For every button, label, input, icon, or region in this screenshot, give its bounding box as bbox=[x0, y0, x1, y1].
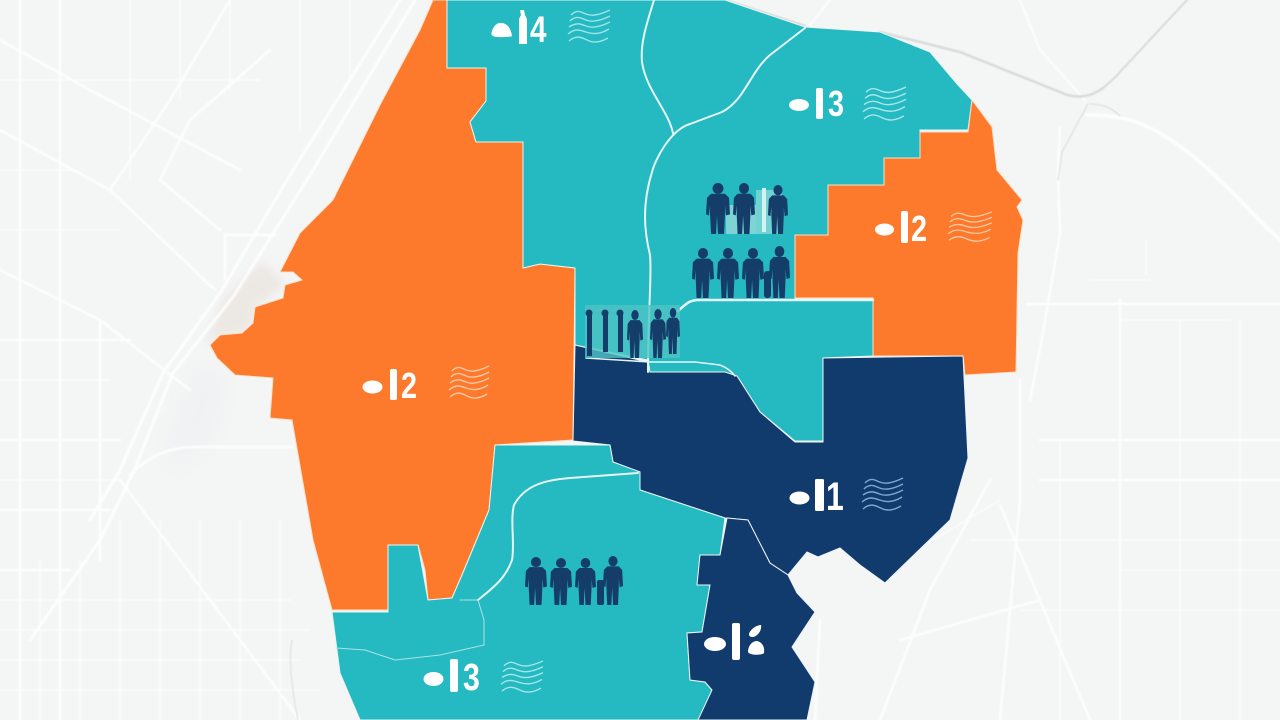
people row: middle bbox=[692, 246, 790, 298]
icon: person bar bbox=[390, 369, 397, 400]
region: west orange district bbox=[210, 0, 575, 610]
boundary lines: rivers and roads bbox=[336, 0, 873, 660]
icon: waves bbox=[862, 478, 903, 510]
icon: cloud bbox=[704, 637, 726, 651]
icon: cloud bbox=[424, 672, 444, 686]
data group: south teal bbox=[424, 657, 543, 699]
data group: northeast teal bbox=[789, 83, 906, 124]
value: 4 bbox=[530, 10, 547, 51]
value: 3 bbox=[463, 657, 480, 699]
icon: waves bbox=[863, 87, 906, 120]
region: central navy district bbox=[573, 345, 968, 583]
icon: cloud bbox=[790, 492, 810, 504]
region: north teal district bbox=[447, 0, 972, 441]
icon: person bar bbox=[901, 211, 908, 243]
icon: cloud bbox=[362, 380, 382, 394]
icon: waves bbox=[568, 10, 610, 42]
value: 2 bbox=[911, 208, 927, 249]
icon: upper mark bbox=[749, 625, 761, 637]
value: 1 bbox=[826, 474, 844, 519]
icon: person bar bbox=[816, 88, 823, 119]
region: south teal district bbox=[332, 445, 725, 720]
data group: west orange bbox=[362, 365, 489, 406]
value: 2 bbox=[401, 365, 417, 406]
icon: cloud bbox=[491, 23, 512, 37]
icon: lower mark bbox=[748, 641, 764, 655]
icon: waves bbox=[948, 212, 992, 241]
icon: person bar bbox=[519, 10, 527, 44]
icon: person bar bbox=[732, 623, 740, 660]
region: south navy district bbox=[687, 518, 815, 720]
icon: cloud bbox=[789, 99, 809, 111]
icon: person bar bbox=[815, 479, 824, 511]
people row: centre crossing bbox=[585, 305, 680, 358]
data group: north teal bbox=[491, 10, 610, 51]
data group: central navy bbox=[790, 474, 903, 519]
icon: waves bbox=[501, 661, 543, 692]
people row: upper bbox=[706, 183, 788, 234]
icon: cloud bbox=[875, 224, 894, 236]
icon: waves bbox=[449, 366, 489, 398]
value: 3 bbox=[828, 83, 844, 124]
people row: south bbox=[525, 556, 623, 605]
data group: south navy bbox=[704, 623, 764, 660]
region: east orange district bbox=[795, 100, 1023, 375]
data group: east orange bbox=[875, 208, 992, 249]
icon: person bar bbox=[450, 659, 458, 692]
